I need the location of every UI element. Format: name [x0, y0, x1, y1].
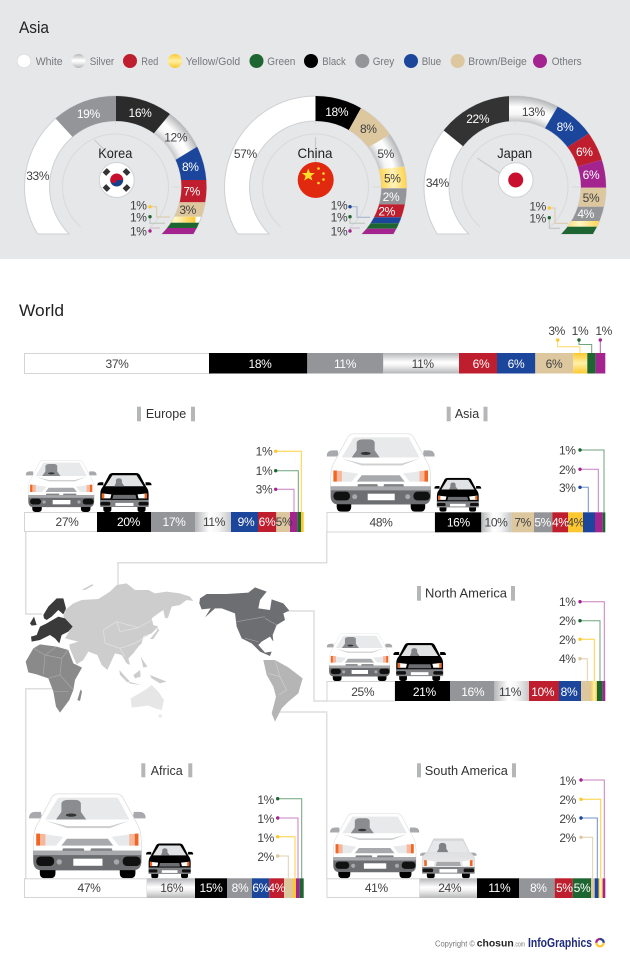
bar chart: World: 18%	[249, 357, 272, 371]
connector: Asia to map	[118, 532, 327, 585]
bar chart: North America: 10%	[531, 685, 555, 699]
label: Japan values: 4%	[577, 207, 595, 221]
callouts: Europe small values: 3%	[256, 482, 273, 496]
bar chart: Europe: 27%	[56, 515, 79, 529]
bar chart: South America	[327, 878, 605, 898]
label: Japan values: 5%	[583, 191, 600, 205]
icon: white car	[327, 434, 435, 512]
callouts: Asia small values: 1%	[559, 444, 576, 458]
bar chart: Africa: 8%	[232, 881, 249, 895]
label: Korea values: 3%	[179, 203, 197, 217]
callouts: Europe small values: 1%	[256, 444, 273, 458]
callouts: World small values: 1%	[572, 324, 589, 338]
label: Korea values: 19%	[77, 107, 100, 121]
label: Japan values: 6%	[576, 145, 593, 159]
callouts: North America small values: 2%	[559, 614, 576, 628]
callouts: Africa small values: 1%	[257, 831, 275, 845]
bar chart: Asia: 10%	[485, 516, 508, 530]
connector: Europe to map	[26, 532, 42, 614]
bar chart: Asia: 5%	[534, 516, 552, 530]
label: Japan values: 34%	[426, 176, 449, 190]
label: Korea values: 12%	[164, 130, 188, 144]
bar chart: South America: 5%	[574, 881, 591, 895]
icon: black car	[393, 643, 446, 681]
callouts: Asia small values: 3%	[559, 481, 576, 495]
label: Korea values: 7%	[183, 184, 201, 198]
callouts: Asia small values	[559, 444, 604, 512]
label: Japan name: Japan	[497, 145, 532, 161]
connector: Africa to map	[26, 689, 52, 879]
region: Asia	[327, 407, 605, 532]
icon: black car	[434, 478, 481, 512]
bar chart: Africa: 15%	[200, 881, 223, 895]
bar chart: Asia: 4%	[552, 516, 569, 530]
bar chart: Africa: 4%	[268, 881, 286, 895]
region: South America	[327, 763, 605, 898]
bar chart: North America	[327, 681, 605, 701]
callouts: Africa small values: 1%	[257, 812, 275, 826]
bar chart: World: 6%	[508, 357, 525, 371]
label: Japan values: 8%	[557, 120, 574, 134]
label: China values: 18%	[325, 105, 349, 119]
bar chart: Africa: 47%	[78, 881, 101, 895]
icon: silver car	[420, 839, 477, 878]
callouts: China small values: 1%	[331, 210, 348, 224]
heading: World: World	[19, 301, 64, 320]
bar chart: Europe: 6%	[259, 515, 276, 529]
callouts: World small values: 3%	[548, 324, 566, 338]
region: North America	[327, 586, 605, 701]
callouts: Africa small values: 2%	[257, 850, 275, 864]
label: Korea values: 33%	[26, 169, 50, 183]
icon: white car	[330, 814, 419, 878]
callouts: North America small values: 1%	[559, 595, 576, 609]
icon: black car	[146, 844, 193, 878]
callouts: Korea small values: 1%	[130, 198, 147, 212]
bar chart: World: 6%	[473, 357, 490, 371]
callouts: North America small values: 2%	[559, 633, 576, 647]
label: China values: 5%	[384, 172, 401, 186]
label: China name: China	[298, 145, 333, 161]
callouts: Korea small values	[130, 198, 170, 238]
label: Korea values	[26, 106, 201, 217]
bar chart: North America: 25%	[351, 685, 375, 699]
icon: Chinese flag	[298, 162, 334, 198]
bar chart: Africa: 16%	[160, 881, 184, 895]
bar chart: South America: 5%	[556, 881, 573, 895]
label: China values: 2%	[383, 190, 400, 204]
legend	[17, 54, 582, 68]
bar chart: North America: 11%	[499, 685, 522, 699]
world map: the Americas	[199, 587, 303, 722]
callouts: Korea small values: 1%	[130, 224, 147, 238]
bar chart: Asia: 16%	[447, 516, 470, 530]
bar chart: World: 11%	[412, 357, 434, 371]
callouts: Asia small values: 2%	[559, 463, 576, 477]
label: Japan values: 6%	[583, 168, 600, 182]
label: China values: 2%	[378, 204, 396, 218]
bar chart: World: 37%	[106, 357, 129, 371]
bar chart: World	[24, 353, 605, 374]
heading: Asia region	[447, 407, 488, 421]
callouts: Africa small values	[257, 793, 302, 878]
label: China values: 8%	[360, 122, 377, 136]
callouts: South America small values: 2%	[559, 812, 577, 826]
bar chart: Africa: 6%	[252, 881, 270, 895]
icon: Japanese flag	[498, 163, 533, 197]
bar chart: World: 6%	[546, 357, 563, 371]
world map: Eurasia, Africa, Australia	[26, 583, 193, 718]
heading: Africa	[141, 763, 192, 778]
callouts: South America small values: 1%	[559, 774, 577, 788]
bar chart: South America: 11%	[488, 881, 511, 895]
heading: South America: South America	[425, 764, 508, 778]
heading: Europe: Europe	[146, 407, 186, 421]
icon: white car	[26, 460, 97, 512]
bar chart: Asia	[327, 512, 605, 532]
heading: Africa: Africa	[151, 764, 183, 778]
callouts: Korea small values: 1%	[130, 210, 147, 224]
legend: Green	[267, 56, 295, 68]
bar chart: South America: 24%	[438, 881, 462, 895]
bar chart: Europe: 5%	[276, 515, 293, 529]
heading: Asia: Asia	[19, 18, 49, 37]
bar chart: Europe: 11%	[203, 515, 226, 529]
legend: Yellow/Gold	[186, 56, 240, 68]
icon: white car	[327, 634, 392, 681]
bar chart: Asia: 48%	[370, 516, 393, 530]
legend: Brown/Beige	[468, 56, 527, 68]
bar chart: North America: 16%	[461, 685, 485, 699]
bar chart: Europe: 20%	[117, 515, 141, 529]
bar chart: Asia: 4%	[567, 516, 585, 530]
callouts: Japan small values: 1%	[529, 212, 547, 226]
label: Korea name: Korea	[98, 145, 132, 161]
credit line: .com	[514, 942, 525, 948]
bar chart: Europe: 9%	[238, 515, 255, 529]
label: China values: 5%	[377, 147, 395, 161]
credit line: chosun	[477, 938, 514, 950]
panel: Asia background	[0, 0, 630, 259]
gauge: China	[224, 96, 407, 234]
label: China values	[234, 105, 401, 218]
icon: white car	[29, 794, 146, 878]
heading: Europe	[137, 407, 195, 421]
label: Japan values	[426, 105, 600, 221]
bar chart: South America: 8%	[530, 881, 547, 895]
bar chart: North America: 8%	[561, 685, 578, 699]
label: China values: 57%	[234, 147, 257, 161]
callouts: South America small values	[559, 774, 604, 878]
callouts: China small values: 1%	[331, 198, 348, 212]
region: Europe	[24, 407, 304, 532]
callouts: North America small values	[559, 595, 604, 681]
callouts: World small values: 1%	[595, 324, 613, 338]
legend: Silver	[90, 56, 114, 68]
legend: White	[36, 56, 63, 68]
callouts: Europe small values: 1%	[256, 464, 273, 478]
heading: Asia region: Asia	[455, 407, 479, 421]
credit line: InfoGraphics	[528, 935, 592, 950]
icon: black car	[97, 473, 152, 512]
callouts: Japan small values	[529, 200, 568, 228]
credit line: Copyright ©	[435, 938, 476, 948]
connector: North America to map	[288, 611, 327, 701]
connector: South America to map	[278, 712, 327, 879]
gauge: Korea	[24, 96, 207, 234]
legend: Grey	[373, 56, 395, 68]
icon: Korean flag	[99, 162, 134, 198]
label: Korea values: 16%	[129, 106, 152, 120]
legend: Blue	[422, 56, 441, 68]
region: Africa	[24, 763, 304, 898]
bar chart: Africa	[24, 878, 304, 898]
bar chart: World: 11%	[334, 357, 357, 371]
bar chart: Europe	[24, 512, 304, 532]
label: Korea values: 8%	[182, 160, 199, 174]
callouts: Africa small values: 1%	[257, 793, 275, 807]
bar chart: North America: 21%	[413, 685, 436, 699]
callouts: China small values: 1%	[331, 224, 348, 238]
callouts: World small values	[548, 324, 613, 353]
legend: Red	[141, 56, 158, 68]
label: Japan values: 22%	[466, 112, 490, 126]
callouts: South America small values: 2%	[559, 793, 577, 807]
label: Japan values: 13%	[522, 105, 545, 119]
legend: Others	[552, 56, 582, 68]
gauge: Japan	[424, 96, 606, 234]
credit line	[435, 935, 604, 950]
bar chart: Asia: 7%	[514, 516, 532, 530]
bar chart: South America: 41%	[365, 881, 388, 895]
heading: North America: North America	[425, 587, 507, 601]
callouts: South America small values: 2%	[559, 831, 577, 845]
callouts: Japan small values: 1%	[529, 200, 547, 214]
bar chart: Europe: 17%	[163, 515, 186, 529]
callouts: Europe small values	[256, 444, 301, 512]
legend: Black	[322, 56, 346, 68]
callouts: China small values	[331, 198, 370, 238]
callouts: North America small values: 4%	[559, 652, 576, 666]
